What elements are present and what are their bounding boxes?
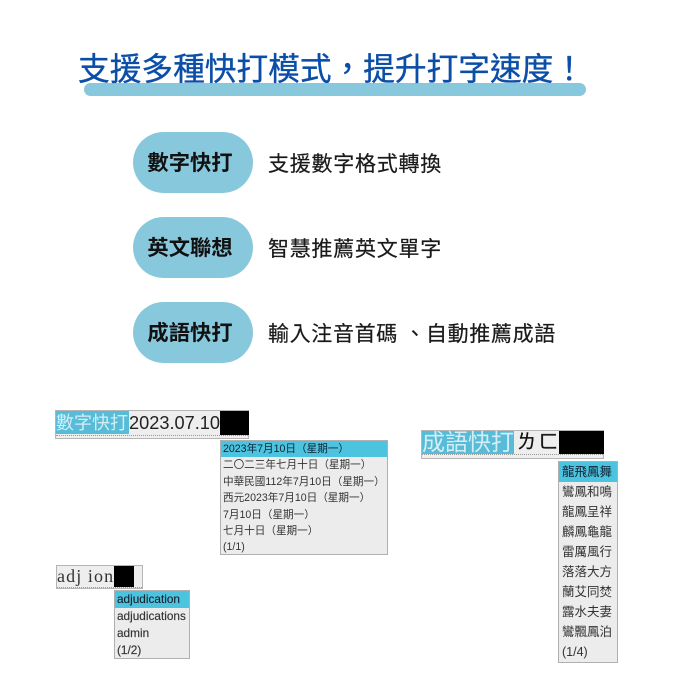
- candidate: admin: [117, 626, 149, 640]
- typed letters: adj ion: [57, 566, 114, 586]
- selected candidate: [221, 441, 387, 457]
- candidate: 中華民國112年7月10日（星期一）: [223, 476, 385, 488]
- typed phonetic symbols: ㄌㄈ: [517, 432, 561, 453]
- candidate: 落落大方: [562, 565, 612, 579]
- candidate: 蘭艾同焚: [562, 585, 612, 599]
- candidate: 龍鳳呈祥: [562, 505, 612, 519]
- candidate list: date formats: [220, 440, 388, 555]
- input box: number quick typing: [55, 410, 249, 439]
- input box: idiom quick typing: [421, 430, 604, 459]
- typed number: 2023.07.10: [129, 413, 220, 433]
- candidate: 雷厲風行: [562, 545, 612, 559]
- cursor block: [559, 431, 604, 454]
- cursor block: [220, 411, 249, 435]
- candidate list: idioms: [558, 461, 618, 663]
- underline bar: [84, 83, 586, 96]
- candidate: 麟鳳龜龍: [562, 525, 612, 539]
- feature row: number quick typing: [133, 132, 442, 193]
- candidate: 鸞鳳和鳴: [562, 485, 612, 499]
- selected candidate: adjudication: [117, 592, 180, 606]
- mode label: 成語快打: [422, 429, 514, 455]
- pill label: 英文聯想: [147, 236, 233, 260]
- candidate: 二〇二三年七月十日（星期一）: [223, 459, 371, 471]
- page indicator: (1/4): [562, 645, 588, 659]
- input box: English suggestion: [56, 565, 143, 589]
- candidate: 露水夫妻: [562, 605, 612, 619]
- candidate: adjudications: [117, 609, 186, 623]
- feature row: idiom quick typing: [133, 302, 556, 363]
- pill label: 成語快打: [147, 321, 233, 345]
- page indicator: (1/2): [117, 643, 141, 657]
- description: 輸入注音首碼 、自動推薦成語: [268, 323, 556, 346]
- description: 智慧推薦英文單字: [268, 238, 442, 261]
- candidate: 鸞飄鳳泊: [562, 625, 612, 639]
- description: 支援數字格式轉換: [268, 153, 442, 176]
- pill label: [133, 217, 253, 278]
- selected candidate: [559, 462, 617, 482]
- candidate: 西元2023年7月10日（星期一）: [223, 492, 370, 504]
- page indicator: (1/1): [223, 541, 245, 553]
- candidate: 七月十日（星期一）: [223, 525, 318, 537]
- selected candidate: 龍飛鳳舞: [562, 465, 612, 479]
- mode label: 數字快打: [56, 413, 128, 433]
- title text: 支援多種快打模式，提升打字速度！: [78, 51, 585, 87]
- pill label: [133, 302, 253, 363]
- title with underline bar: [78, 51, 586, 96]
- selected candidate: 2023年7月10日（星期一）: [223, 443, 349, 455]
- cursor block: [114, 566, 134, 587]
- pill label: 數字快打: [147, 151, 233, 175]
- pill label: [133, 132, 253, 193]
- candidate: 7月10日（星期一）: [223, 509, 315, 521]
- feature row: English suggestion: [133, 217, 442, 278]
- candidate list: English words: [114, 590, 190, 659]
